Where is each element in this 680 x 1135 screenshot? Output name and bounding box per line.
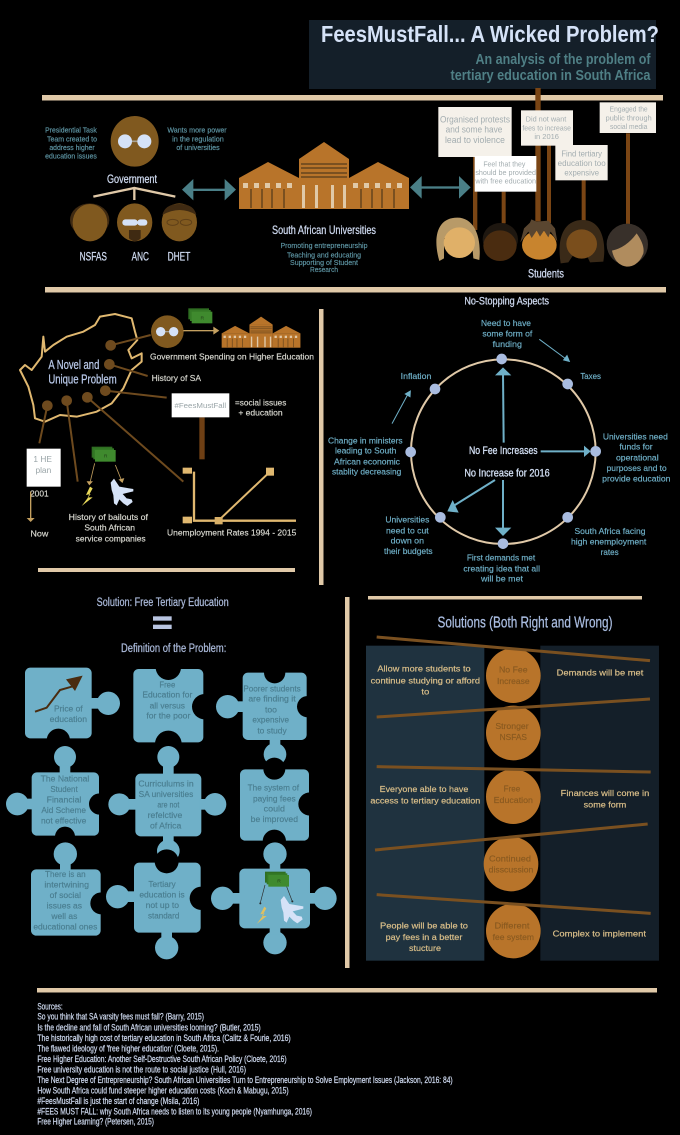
- history label: History of SA: [152, 373, 201, 383]
- novel problem heading: [48, 358, 117, 387]
- sign: social media: social media: [610, 122, 648, 131]
- right column background: [540, 646, 659, 961]
- aspect: first demands: [463, 553, 540, 584]
- puzzle piece: system of paying fees: [240, 758, 322, 853]
- circle label: no fee increase: Increase: [497, 676, 530, 686]
- HE plan sign: [27, 449, 61, 487]
- con: free education: some form: [584, 799, 626, 809]
- power note: in the regulation: [172, 134, 224, 143]
- novel problem heading: A Novel and: [48, 358, 99, 372]
- government label: Government: [107, 172, 157, 186]
- equals sign: [153, 616, 172, 629]
- definition heading: Definition of the Problem:: [121, 641, 226, 655]
- puzzle piece: price of education: [25, 668, 120, 752]
- circle label: continued discussion: [489, 853, 534, 875]
- sources list: The flawed ideology of 'free higher education' (Cloete, 2015).: [37, 1044, 219, 1054]
- aspect: operational funds: provide education: [602, 473, 671, 483]
- circle label: different fee system: fee system: [493, 932, 534, 942]
- puzzle piece: poorer students: too: [265, 704, 277, 714]
- puzzle piece: free education: all versus: [150, 700, 186, 710]
- pro: no fee increase: [371, 664, 480, 696]
- pro: different fee system: stucture: [409, 943, 441, 953]
- DHET label: DHET: [168, 250, 191, 264]
- sign: organised protests: lead to violence: [445, 135, 505, 145]
- aspect: budgets: down on: [391, 536, 424, 546]
- aspect: unemployment: [571, 526, 647, 557]
- puzzle piece: price of education: Price of: [54, 703, 83, 713]
- hashtag sign: #FeesMustFall: [174, 401, 226, 410]
- panel: government: [45, 116, 236, 264]
- students label: Students: [528, 266, 564, 280]
- icon: student head 4: [560, 220, 604, 263]
- bailouts label: South African: [84, 523, 135, 533]
- unemployment label: Unemployment Rates 1994 - 2015: [167, 528, 297, 538]
- sources list: The historically high cost of tertiary education in South Africa (Calitz & Fourie, 2016): [37, 1033, 291, 1043]
- pro: different fee system: pay fees in a better: [386, 932, 462, 942]
- hashtag sign: [172, 393, 229, 459]
- circle label: free education: [494, 783, 533, 805]
- arrow: universities to students: [410, 176, 471, 199]
- sources list: So you think that SA varsity fees must fall? (Barry, 2015): [37, 1012, 204, 1022]
- aspect: inflation: Inflation: [401, 371, 432, 381]
- cycle ring: [411, 359, 596, 544]
- sign: too expensive: [555, 145, 608, 180]
- aspect: ministers: Change in ministers: [328, 435, 403, 445]
- sources list: The Next Degree of Entrepreneurship? South African Universities Turn to Entrepreneurship to Solve Employment Issues (Jackson, 2016: 84): [37, 1075, 453, 1085]
- universities heading: South African Universities: [272, 223, 376, 237]
- sign: fee increase 2016: Did not want: [526, 115, 566, 124]
- task team note: Team created to: [47, 134, 97, 143]
- aspect: operational funds: [602, 431, 671, 483]
- puzzle piece: system of paying fees: be improved: [251, 814, 298, 824]
- power note: of universities: [176, 143, 220, 152]
- puzzle piece: system of paying fees: paying fees: [253, 793, 296, 803]
- timeline: Now: [30, 529, 49, 539]
- timeline: 2001: [30, 489, 49, 499]
- solutions heading: Solutions (Both Right and Wrong): [437, 615, 612, 632]
- puzzle piece: poorer students: are finding it: [248, 694, 296, 704]
- circle label: free education: Education: [494, 795, 533, 805]
- hashtag equation: =social issues: [235, 397, 286, 407]
- puzzle piece: free education: [133, 655, 217, 757]
- panel: students: [410, 88, 656, 280]
- sign: free education: [474, 156, 536, 192]
- thin cycle arrows: [392, 339, 569, 424]
- puzzle piece: intertwining issues: issues as: [47, 900, 83, 910]
- puzzle piece: free education: Education for: [142, 690, 192, 700]
- ANC label: ANC: [132, 250, 149, 264]
- aspect: taxes: Taxes: [580, 371, 601, 381]
- circle label: no fee increase: [497, 664, 530, 686]
- pro: different fee system: People will be able to: [380, 920, 468, 930]
- icon: ANC head: [117, 203, 152, 241]
- puzzle piece: curriculums: refelctive: [148, 810, 183, 820]
- puzzle piece: curriculums: SA universities: [139, 789, 194, 799]
- sign: organised protests: Organised protests: [440, 114, 510, 124]
- puzzle piece: not up to standard: education is: [139, 889, 185, 899]
- seesaw lines: [375, 637, 651, 913]
- icon: banknotes: [188, 308, 212, 323]
- aspect: operational funds: operational: [616, 452, 659, 462]
- puzzle piece: bailouts: [211, 842, 337, 954]
- circle label: stronger NSFAS: NSFAS: [500, 732, 527, 742]
- sources list: #FEES MUST FALL: why South Africa needs to listen to its young people (Nyamhunga, 2016): [37, 1106, 312, 1116]
- aspect: budgets: need to cut: [386, 525, 429, 535]
- sign: too expensive: Find tertiary: [561, 149, 602, 158]
- arrows to bailout companies: [87, 463, 124, 485]
- sign: free education: with free education: [474, 177, 536, 186]
- icon: student head 5: [607, 224, 648, 267]
- icon: small university: [222, 317, 300, 348]
- aspect: ministers: African economic: [334, 456, 400, 466]
- circle label: different fee system: [493, 921, 534, 942]
- timeline: [27, 489, 49, 539]
- aspect: ministers: leading to South: [335, 446, 397, 456]
- power note: [167, 126, 227, 152]
- con: no fee increase: Demands will be met: [557, 668, 644, 678]
- power note: Wants more power: [167, 126, 227, 135]
- sign: social media: Engaged the: [610, 105, 648, 114]
- puzzle piece: curriculums: [108, 746, 226, 862]
- universities roles: Promoting entrepreneurship: [280, 241, 368, 250]
- hashtag equation: [235, 397, 286, 418]
- task team note: education issues: [45, 152, 97, 161]
- icon: universities building: [239, 142, 409, 209]
- subtitle: [450, 51, 651, 84]
- map of South Africa: [20, 314, 142, 422]
- puzzle piece: NSFAS not effective: Aid Scheme: [41, 805, 86, 815]
- aspect: funding: some form of: [482, 329, 533, 339]
- circle label: continued discussion: Continued: [489, 853, 531, 863]
- aspect: operational funds: funds for: [619, 442, 653, 452]
- con: free education: Finances will come in: [561, 788, 650, 798]
- puzzle piece: system of paying fees: could: [264, 804, 285, 814]
- aspect: first demands: will be met: [480, 574, 524, 584]
- puzzle piece: curriculums: of Africa: [150, 820, 182, 830]
- puzzle piece: poorer students: to study: [257, 725, 287, 735]
- NSFAS label: NSFAS: [80, 250, 107, 264]
- HE plan sign: plan: [35, 465, 52, 475]
- puzzle piece: not up to standard: [106, 849, 213, 959]
- central arrows: [447, 367, 591, 536]
- solution circles: [484, 648, 541, 958]
- icon: government head: [111, 116, 159, 167]
- puzzle piece: NSFAS not effective: The National: [41, 773, 89, 783]
- universities roles: Supporting of Student: [290, 258, 359, 267]
- aspect: unemployment: rates: [601, 547, 619, 557]
- HE plan sign: 1 HE: [33, 454, 52, 464]
- circle label: stronger NSFAS: [495, 721, 529, 742]
- line chart: unemployment: [183, 468, 296, 524]
- arrow: government to universities: [182, 179, 236, 200]
- puzzle piece: NSFAS not effective: [6, 746, 110, 847]
- centre labels: No Fee Increases: [469, 445, 538, 457]
- icon: student head 2: [483, 223, 518, 261]
- puzzle piece: poorer students: expensive: [252, 715, 289, 725]
- pro: free education: access to tertiary education: [370, 795, 481, 805]
- solution heading: Solution: Free Tertiary Education: [97, 595, 229, 609]
- sources list: #FeesMustFall is just the start of change (Msila, 2016): [37, 1096, 199, 1106]
- left column background: [366, 646, 484, 961]
- icon: DHET head: [162, 203, 197, 241]
- sources list: [37, 1001, 453, 1127]
- pro: free education: [370, 784, 481, 805]
- pro: no fee increase: Allow more students to: [377, 664, 471, 674]
- title banner: [309, 20, 659, 89]
- sign: free education: Feel that they: [483, 159, 526, 168]
- puzzle piece: NSFAS not effective: Student: [50, 784, 78, 794]
- aspect: operational funds: purposes and to: [607, 463, 667, 473]
- puzzle piece: NSFAS not effective: Financial: [47, 794, 81, 804]
- panel: a novel and unique problem: [20, 308, 314, 543]
- sources list: Free Higher Learning? (Petersen, 2015): [37, 1117, 154, 1127]
- aspect: first demands: creating idea that all: [463, 563, 540, 573]
- sources list: Is the decline and fall of South African universities looming? (Butler, 2015): [37, 1022, 261, 1032]
- pro: no fee increase: continue studying or afford: [371, 675, 480, 685]
- puzzle piece: curriculums: Curriculums in: [138, 778, 194, 788]
- icon: student head 1: [436, 218, 480, 261]
- circle label: free education: Free: [504, 783, 520, 793]
- puzzle piece: intertwining issues: of social: [50, 890, 81, 900]
- aspect: funding: funding: [493, 339, 522, 349]
- sign: too expensive: expensive: [564, 169, 600, 178]
- map pins: [42, 340, 116, 411]
- aspect: first demands: First demands met: [467, 553, 536, 563]
- con: different fee system: Complex to implement: [553, 929, 647, 939]
- sources list: Free university education is not the route to social justice (Hull, 2016): [37, 1065, 246, 1075]
- universities roles: Research: [310, 265, 338, 274]
- aspect: funding: Need to have: [481, 318, 531, 328]
- puzzle piece: free education: Free: [159, 679, 175, 689]
- icon: bailout money: R: [104, 454, 108, 460]
- aspect: unemployment: South Africa facing: [574, 526, 646, 536]
- icon: student head 3: [520, 219, 557, 260]
- icon: bailout money: [92, 447, 116, 462]
- sign: free education: should be provided: [475, 168, 536, 177]
- task team note: Presidential Task: [45, 126, 97, 135]
- aspect: operational funds: Universities need: [603, 431, 668, 441]
- puzzle piece: intertwining issues: There is an: [45, 869, 86, 879]
- panel: definition of the problem: [6, 595, 337, 959]
- puzzle piece: not up to standard: Tertiary: [148, 879, 176, 889]
- sign: organised protests: [438, 107, 512, 157]
- novel problem heading: Unique Problem: [48, 373, 117, 387]
- puzzle piece: intertwining issues: well as: [50, 911, 78, 921]
- circle label: continued discussion: disscussion: [489, 865, 534, 875]
- map connector lines: [39, 335, 183, 482]
- aspect: ministers: [328, 435, 403, 477]
- puzzle piece: intertwining issues: [31, 842, 112, 936]
- sign: organised protests: and some have: [446, 125, 502, 135]
- pro: free education: Everyone able to have: [380, 784, 469, 794]
- bailouts label: History of bailouts of: [69, 512, 149, 522]
- bailouts label: service companies: [76, 533, 146, 543]
- aspect: budgets: [384, 515, 433, 556]
- puzzle piece: curriculums: are not: [157, 799, 180, 809]
- pro: no fee increase: to: [421, 686, 430, 696]
- government spending label: Government Spending on Higher Education: [150, 351, 314, 361]
- aspect: ministers: stablity decreasing: [332, 467, 402, 477]
- hashtag equation: + education: [238, 408, 283, 418]
- no-stopping heading: No-Stopping Aspects: [464, 295, 549, 307]
- sign: too expensive: education too: [558, 159, 606, 168]
- subtitle: An analysis of the problem of: [476, 51, 651, 68]
- pro: different fee system: [380, 920, 468, 953]
- puzzle piece: system of paying fees: The system of: [248, 783, 300, 793]
- sources list: Free Higher Education: Another Self-Destructive South African Policy (Cloete, 2016): [37, 1054, 287, 1064]
- puzzle piece: not up to standard: standard: [148, 910, 180, 920]
- icon: banknotes: R: [201, 316, 205, 322]
- puzzle piece: poorer students: Poorer students: [243, 683, 301, 693]
- sign: fee increase 2016: fees to increase: [522, 123, 571, 132]
- panel: universities text: [272, 223, 376, 274]
- sources list: Sources:: [37, 1001, 63, 1011]
- puzzle piece: intertwining issues: educational ones: [33, 921, 98, 931]
- aspect: unemployment: high enemployment: [571, 537, 647, 547]
- universities roles: [280, 241, 368, 274]
- puzzle piece: intertwining issues: intertwining: [44, 880, 89, 890]
- icon: NSFAS head: [70, 203, 109, 241]
- circle label: no fee increase: No Fee: [499, 664, 528, 674]
- task team note: address higher: [49, 143, 95, 152]
- sign: fee increase 2016: in 2016: [534, 132, 559, 141]
- panel: no-stopping aspects: [328, 295, 671, 584]
- cycle nodes: [405, 354, 601, 549]
- icon: plane: [111, 479, 133, 506]
- aspect: budgets: their budgets: [384, 546, 433, 556]
- circle label: stronger NSFAS: Stronger: [495, 721, 529, 731]
- puzzle piece: price of education: education: [50, 714, 87, 724]
- puzzle piece: bailouts: R: [277, 879, 281, 885]
- con: free education: [561, 788, 650, 809]
- puzzle piece: poorer students: [216, 662, 318, 766]
- task team note: [45, 126, 97, 161]
- icon: government head: [151, 315, 184, 348]
- panel: solutions: [366, 615, 659, 961]
- arrow: spending to universities: [183, 327, 219, 335]
- sources list: How South Africa could fund steeper higher education costs (Koch & Mabugu, 2015): [37, 1086, 289, 1096]
- protest sign poles: [473, 88, 630, 230]
- aspect: funding: [481, 318, 533, 349]
- icon: lightning bolt: [82, 487, 93, 506]
- sign: social media: public through: [606, 113, 652, 122]
- centre labels: No Increase for 2016: [464, 468, 550, 480]
- universities roles: Teaching and educating: [287, 250, 361, 260]
- circle label: different fee system: Different: [494, 921, 530, 931]
- aspect: budgets: Universities: [385, 515, 429, 525]
- puzzle piece: not up to standard: not up to: [146, 900, 179, 910]
- sign: fee increase 2016: [521, 110, 573, 146]
- hierarchy branches: [93, 188, 175, 200]
- centre labels: [464, 445, 550, 480]
- subtitle: tertiary education in South Africa: [450, 67, 651, 84]
- sign: social media: [600, 102, 656, 133]
- bailouts label: [69, 512, 149, 543]
- puzzle piece: free education: for the poor: [146, 711, 190, 721]
- puzzle piece: NSFAS not effective: not effective: [41, 815, 87, 825]
